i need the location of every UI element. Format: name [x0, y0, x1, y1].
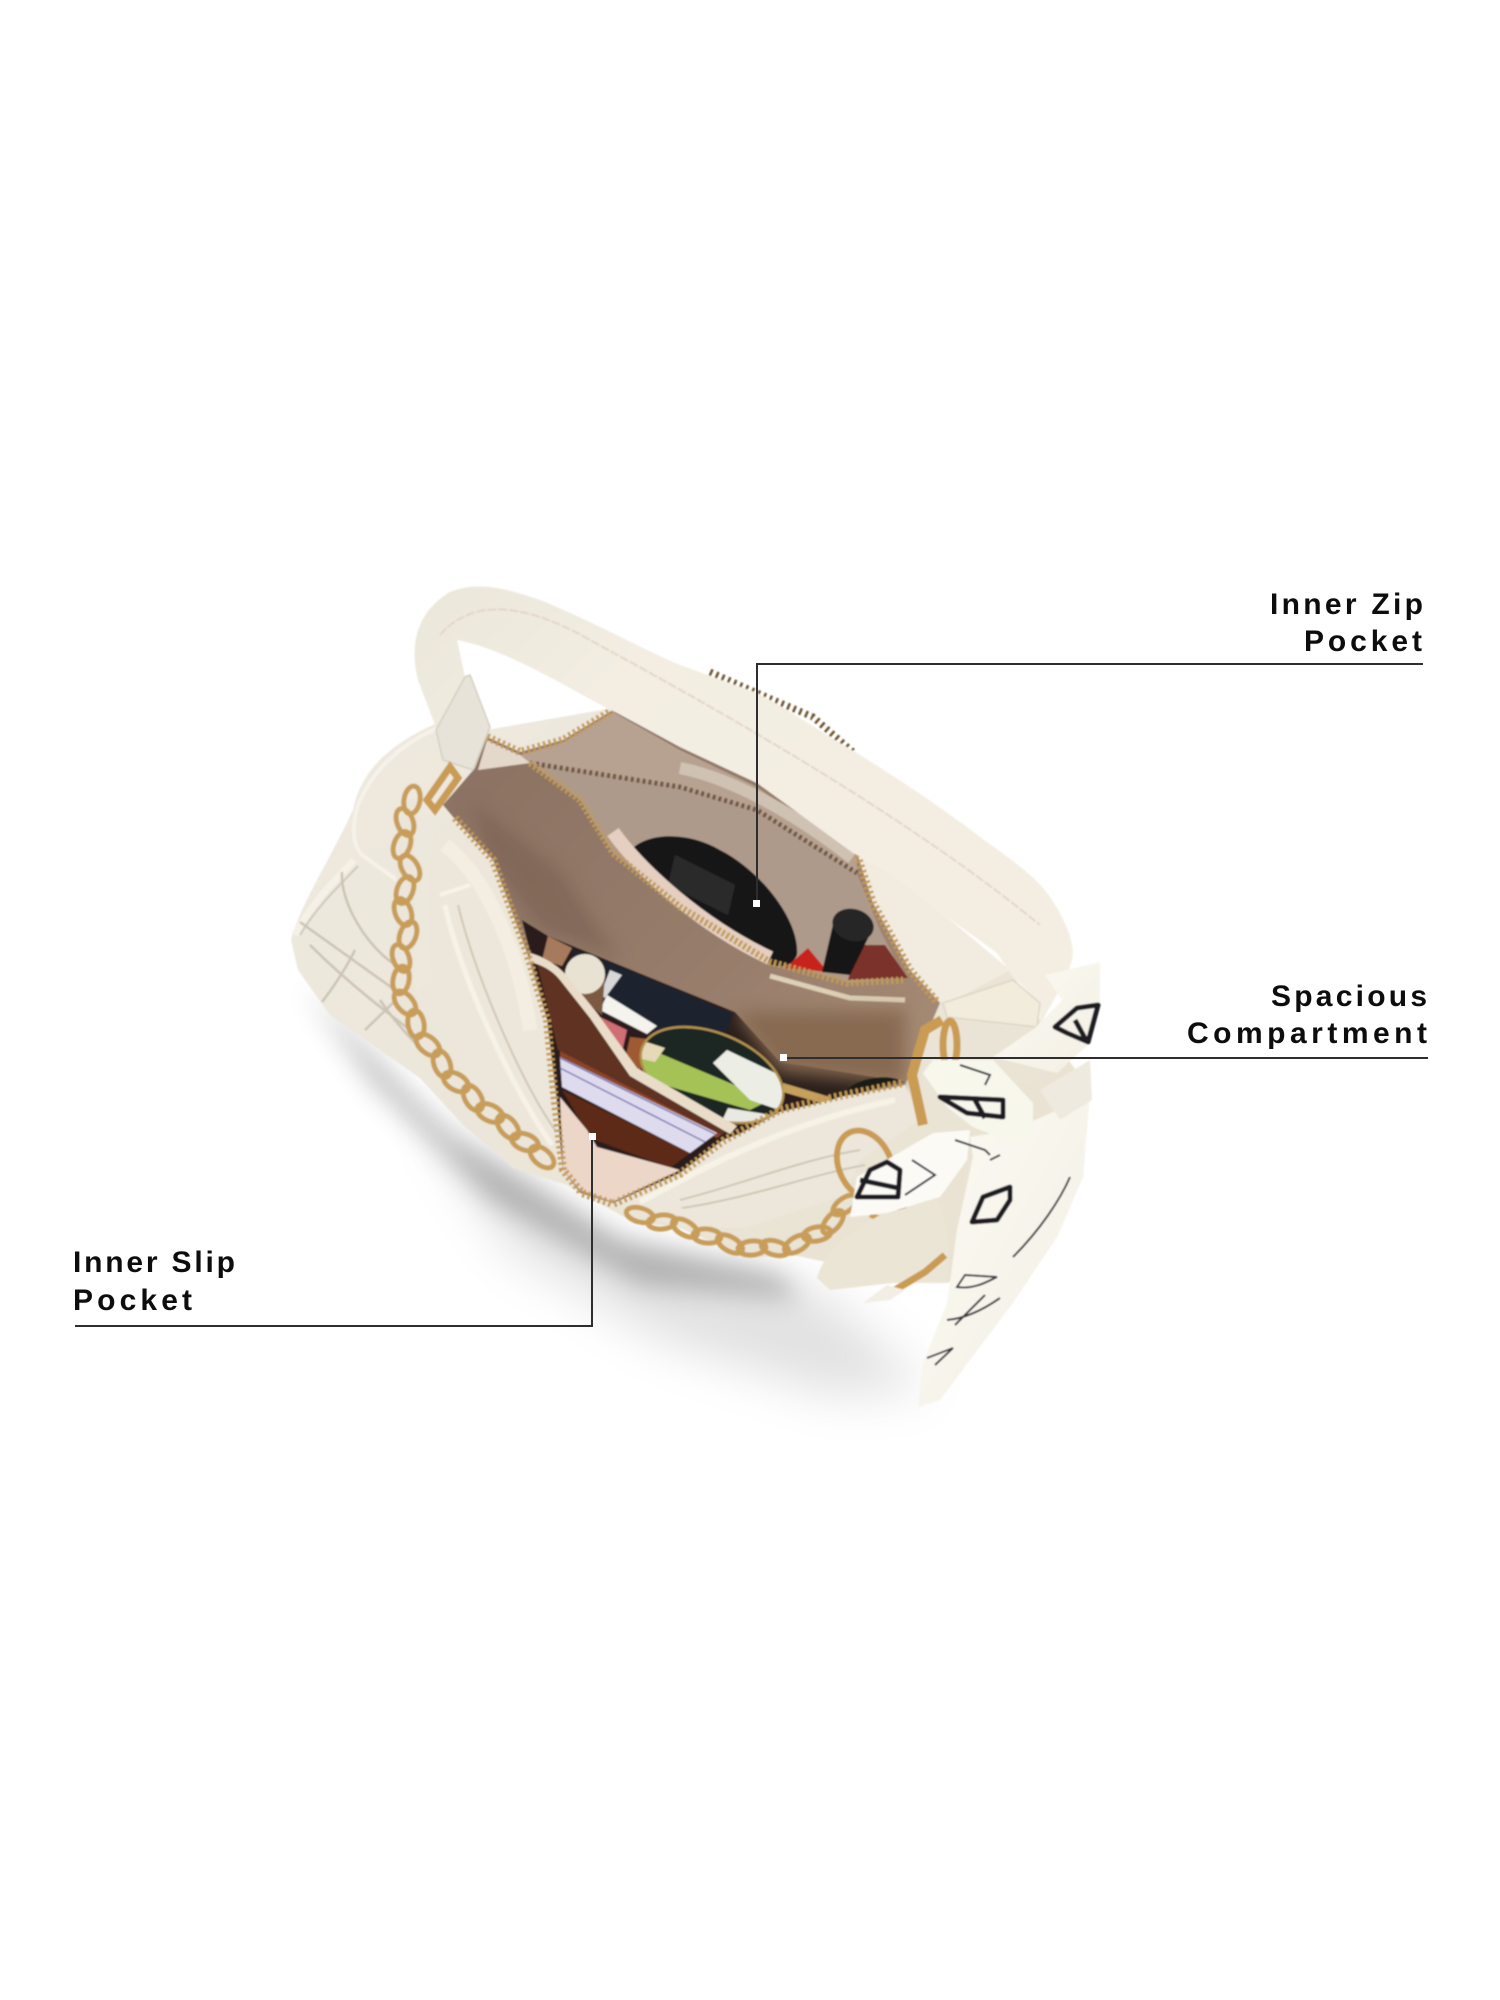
- bag drop shadow: [305, 985, 930, 1395]
- callout: Inner Zip Pocket: [753, 588, 1423, 907]
- inner pocket zippers: [530, 763, 905, 1000]
- slip pocket lining: [560, 1097, 680, 1202]
- notebook: [560, 1050, 727, 1168]
- upper lining: [487, 712, 857, 873]
- bag body: [291, 708, 1090, 1283]
- pale lining corner: [478, 740, 530, 770]
- label text: Inner Zip Pocket: [1270, 588, 1423, 658]
- scarf motifs: [857, 1005, 1098, 1222]
- zip pocket interior: [530, 763, 905, 983]
- leader line: [75, 1137, 592, 1326]
- small pouch tab: [863, 1285, 905, 1303]
- handle: [415, 587, 1073, 1025]
- lower compartment base: [522, 920, 905, 1203]
- lower front panel: [620, 1085, 920, 1228]
- leader line: [784, 1057, 1428, 1059]
- marker dot: [780, 1054, 787, 1061]
- marker dot: [753, 900, 760, 907]
- label text: Inner Slip Pocket: [73, 1246, 235, 1317]
- interior of bag: [443, 710, 940, 1203]
- soft wall shading: [470, 800, 620, 960]
- main zippers: [455, 710, 938, 1204]
- callout: Inner Slip Pocket: [73, 1133, 596, 1326]
- sunglasses: [638, 1024, 900, 1126]
- belt in zip pocket: [633, 836, 797, 966]
- right zipper panel: [857, 855, 1010, 1005]
- back zipper: [710, 672, 853, 752]
- label text: Spacious Compartment: Spacious: [1271, 980, 1427, 1013]
- scarf: [850, 962, 1100, 1407]
- bag artwork: [291, 587, 1100, 1407]
- lower panel seams: [640, 1100, 895, 1208]
- left panel seams: [440, 845, 555, 1145]
- items in compartment: [542, 936, 733, 1070]
- pale pocket lip: [613, 832, 770, 958]
- chain strap: left: [389, 785, 558, 1172]
- red item and lipstick: [785, 904, 908, 980]
- label text: Inner Zip Pocket: Pocket: [1304, 625, 1422, 658]
- label text: Inner Slip Pocket: Pocket: [73, 1284, 192, 1317]
- gold hardware: [427, 767, 957, 1218]
- marker dot: [589, 1133, 596, 1140]
- label text: Spacious Compartment: [1187, 980, 1427, 1050]
- pouch chain: [895, 1255, 945, 1290]
- leader line: [757, 664, 1423, 904]
- bottom pouch of bag: [817, 1200, 949, 1290]
- label text: Spacious Compartment: Compartment: [1187, 1017, 1427, 1050]
- flap edge and quilting: [295, 727, 462, 1085]
- label text: Inner Slip Pocket: Inner Slip: [73, 1246, 235, 1279]
- product photo: open handbag: [291, 587, 1100, 1407]
- handle stitching: [440, 609, 1040, 925]
- left handle tab: [436, 675, 490, 770]
- slip pocket rim: [530, 953, 737, 1134]
- right handle tab: [943, 980, 1040, 1027]
- left front panel: [427, 817, 562, 1165]
- chain strap: bottom: [625, 1191, 860, 1258]
- callout: Spacious Compartment: [780, 980, 1428, 1061]
- cream pocket tape: [680, 768, 852, 858]
- slip pocket brown flap: [537, 963, 730, 1135]
- lower pocket shade: [735, 1010, 905, 1085]
- label text: Inner Zip Pocket: Inner Zip: [1270, 588, 1423, 621]
